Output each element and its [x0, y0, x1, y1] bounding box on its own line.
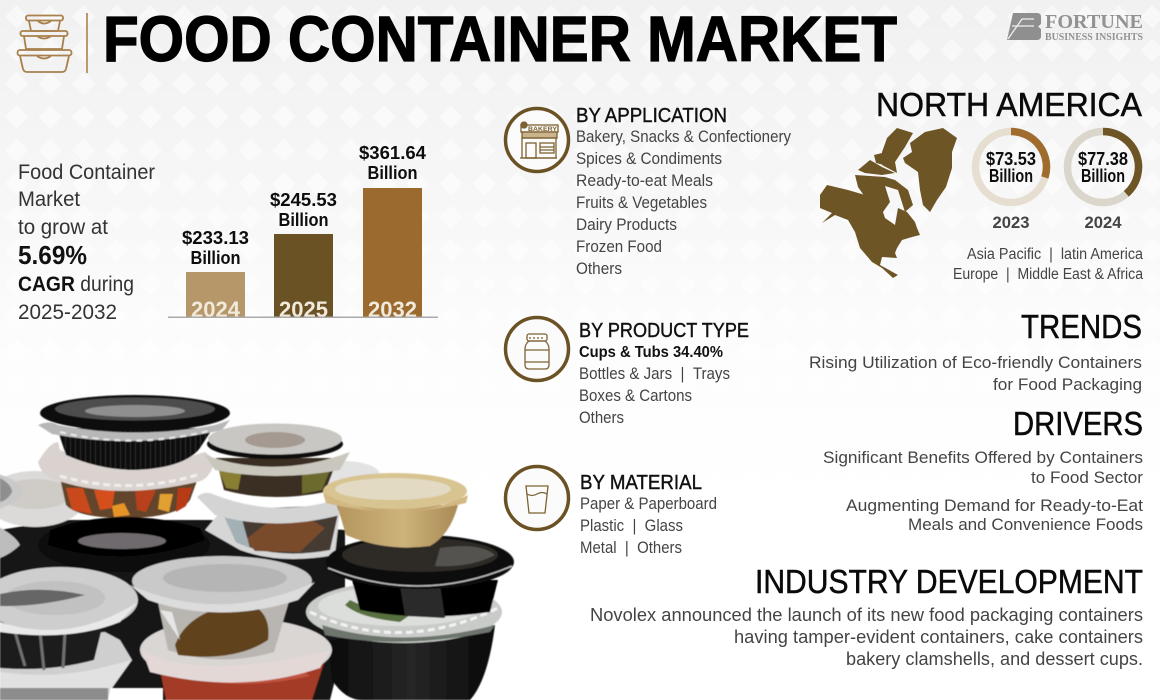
heading: NORTH AMERICA — [876, 86, 1142, 123]
list: product types: Boxes & Cartons — [579, 386, 692, 405]
list: materials: Paper & Paperboard — [580, 494, 717, 513]
title: FOOD CONTAINER MARKET — [103, 3, 897, 75]
trend text: Rising Utilization of Eco-friendly Containers — [809, 353, 1142, 372]
heading: BY APPLICATION — [576, 105, 727, 127]
driver text — [823, 448, 1143, 534]
donut: 2023: Billion — [989, 166, 1033, 186]
left clear lidded container — [0, 567, 138, 670]
icon: jar — [506, 318, 568, 380]
text block: CAGR statement: to grow at — [18, 216, 108, 239]
list: applications: Fruits & Vegetables — [576, 193, 707, 212]
panel: industry development — [590, 563, 1143, 669]
text block: CAGR statement — [18, 161, 155, 324]
donut: 2023 — [976, 132, 1046, 232]
other regions — [953, 246, 1143, 283]
logo: Fortune Business Insights — [1007, 11, 1143, 43]
driver text: Significant Benefits Offered by Containers — [823, 448, 1143, 467]
back-right clear lid — [310, 461, 380, 489]
icon: cup — [506, 466, 568, 530]
bar 2025: $245.53 — [270, 190, 337, 210]
panel: drivers — [823, 405, 1143, 534]
dark backing of the pile — [0, 520, 345, 700]
list: product types — [579, 344, 730, 427]
bar chart: market size — [168, 143, 438, 322]
photo: pile of food containers — [0, 395, 514, 700]
gray container bottom-left — [0, 632, 132, 700]
bar 2032: Billion — [368, 163, 418, 183]
donut: 2024: $77.38 — [1078, 149, 1128, 169]
text block: CAGR statement: Food Container — [18, 161, 155, 184]
heading: BY MATERIAL — [580, 472, 702, 494]
development text — [590, 605, 1143, 669]
icon: stacked food containers — [18, 16, 72, 72]
lower-right black bowl — [328, 625, 495, 700]
bar 2032: 2032 — [368, 297, 417, 322]
other regions: Asia Pacific | latin America — [967, 246, 1143, 263]
gold container — [323, 473, 468, 548]
list: applications: Bakery, Snacks & Confectionery — [576, 127, 791, 146]
list: product types: Others — [579, 408, 624, 427]
list: materials: Metal | Others — [580, 538, 682, 557]
panel: trends — [809, 308, 1142, 394]
bar 2024: Billion — [190, 248, 240, 268]
bar 2024: $233.13 — [182, 228, 249, 248]
logo: Fortune Business Insights: BUSINESS INSIGHTS — [1045, 32, 1143, 43]
trend text: for Food Packaging — [993, 375, 1142, 394]
icon: bakery shop — [506, 108, 568, 172]
black container under gold — [326, 535, 514, 618]
panel: by product type — [506, 318, 749, 427]
development text: Novolex announced the launch of its new food packaging containers — [590, 605, 1143, 625]
list: applications: Others — [576, 259, 622, 278]
clear container with vegetables — [38, 442, 215, 518]
chart baseline — [168, 316, 438, 318]
bar 2032 — [359, 143, 426, 322]
clear lid on lower-right bowl — [306, 581, 502, 643]
panel: by application — [506, 105, 791, 278]
panel: north america — [820, 86, 1143, 283]
bar 2025: 2025 — [279, 297, 328, 322]
center clear container with brown food — [130, 556, 315, 660]
development text: bakery clamshells, and dessert cups. — [846, 649, 1143, 669]
list: product types: Bottles & Jars | Trays — [579, 364, 730, 383]
list: applications: Frozen Food — [576, 237, 662, 256]
text block: CAGR statement: Market — [18, 188, 80, 211]
driver text: to Food Sector — [1031, 468, 1143, 487]
clear mid container with brown food — [197, 493, 340, 559]
heading: DRIVERS — [1013, 405, 1143, 442]
driver text: Augmenting Demand for Ready-to-Eat — [846, 496, 1143, 515]
list: applications: Dairy Products — [576, 215, 677, 234]
bar 2024 — [182, 228, 249, 322]
divider line — [86, 13, 88, 73]
text block: CAGR statement: CAGR during — [18, 273, 134, 296]
bar 2025 — [270, 190, 337, 322]
list: materials — [580, 494, 717, 557]
list: product types: Cups & Tubs 34.40% — [579, 344, 723, 361]
list: applications: Ready-to-eat Meals — [576, 171, 713, 190]
bar 2024: 2024 — [191, 297, 241, 322]
black ribbed container — [38, 395, 230, 470]
other regions: Europe | Middle East & Africa — [953, 266, 1143, 283]
donut: 2023: $73.53 — [986, 149, 1036, 169]
bar 2032: $361.64 — [359, 143, 426, 163]
bar 2025: Billion — [278, 210, 328, 230]
bottom red container — [140, 618, 332, 700]
heading: BY PRODUCT TYPE — [579, 320, 749, 342]
text block: CAGR statement: 5.69% — [18, 240, 87, 270]
clear container with olive food — [205, 424, 350, 497]
donut: 2024: Billion — [1081, 166, 1125, 186]
bottom red lid front rim — [142, 650, 330, 683]
trend text — [809, 353, 1142, 394]
donut: 2024 — [1068, 131, 1139, 232]
list: materials: Plastic | Glass — [580, 516, 683, 535]
panel: by material — [506, 466, 717, 557]
rear black lidded container — [38, 517, 210, 572]
icon: bakery shop: BAKERY — [528, 127, 557, 133]
logo: Fortune Business Insights: FORTUNE — [1045, 11, 1143, 33]
development text: having tamper-evident containers, cake containers — [734, 627, 1143, 647]
back-left clear containers — [0, 471, 85, 560]
map: north america — [820, 128, 957, 278]
list: applications — [576, 127, 791, 278]
heading: TRENDS — [1021, 308, 1142, 345]
list: applications: Spices & Condiments — [576, 149, 722, 168]
text block: CAGR statement: 2025-2032 — [18, 301, 117, 324]
donut: 2023: 2023 — [992, 214, 1030, 232]
donut: 2024: 2024 — [1084, 214, 1122, 232]
driver text: Meals and Convenience Foods — [908, 515, 1143, 534]
